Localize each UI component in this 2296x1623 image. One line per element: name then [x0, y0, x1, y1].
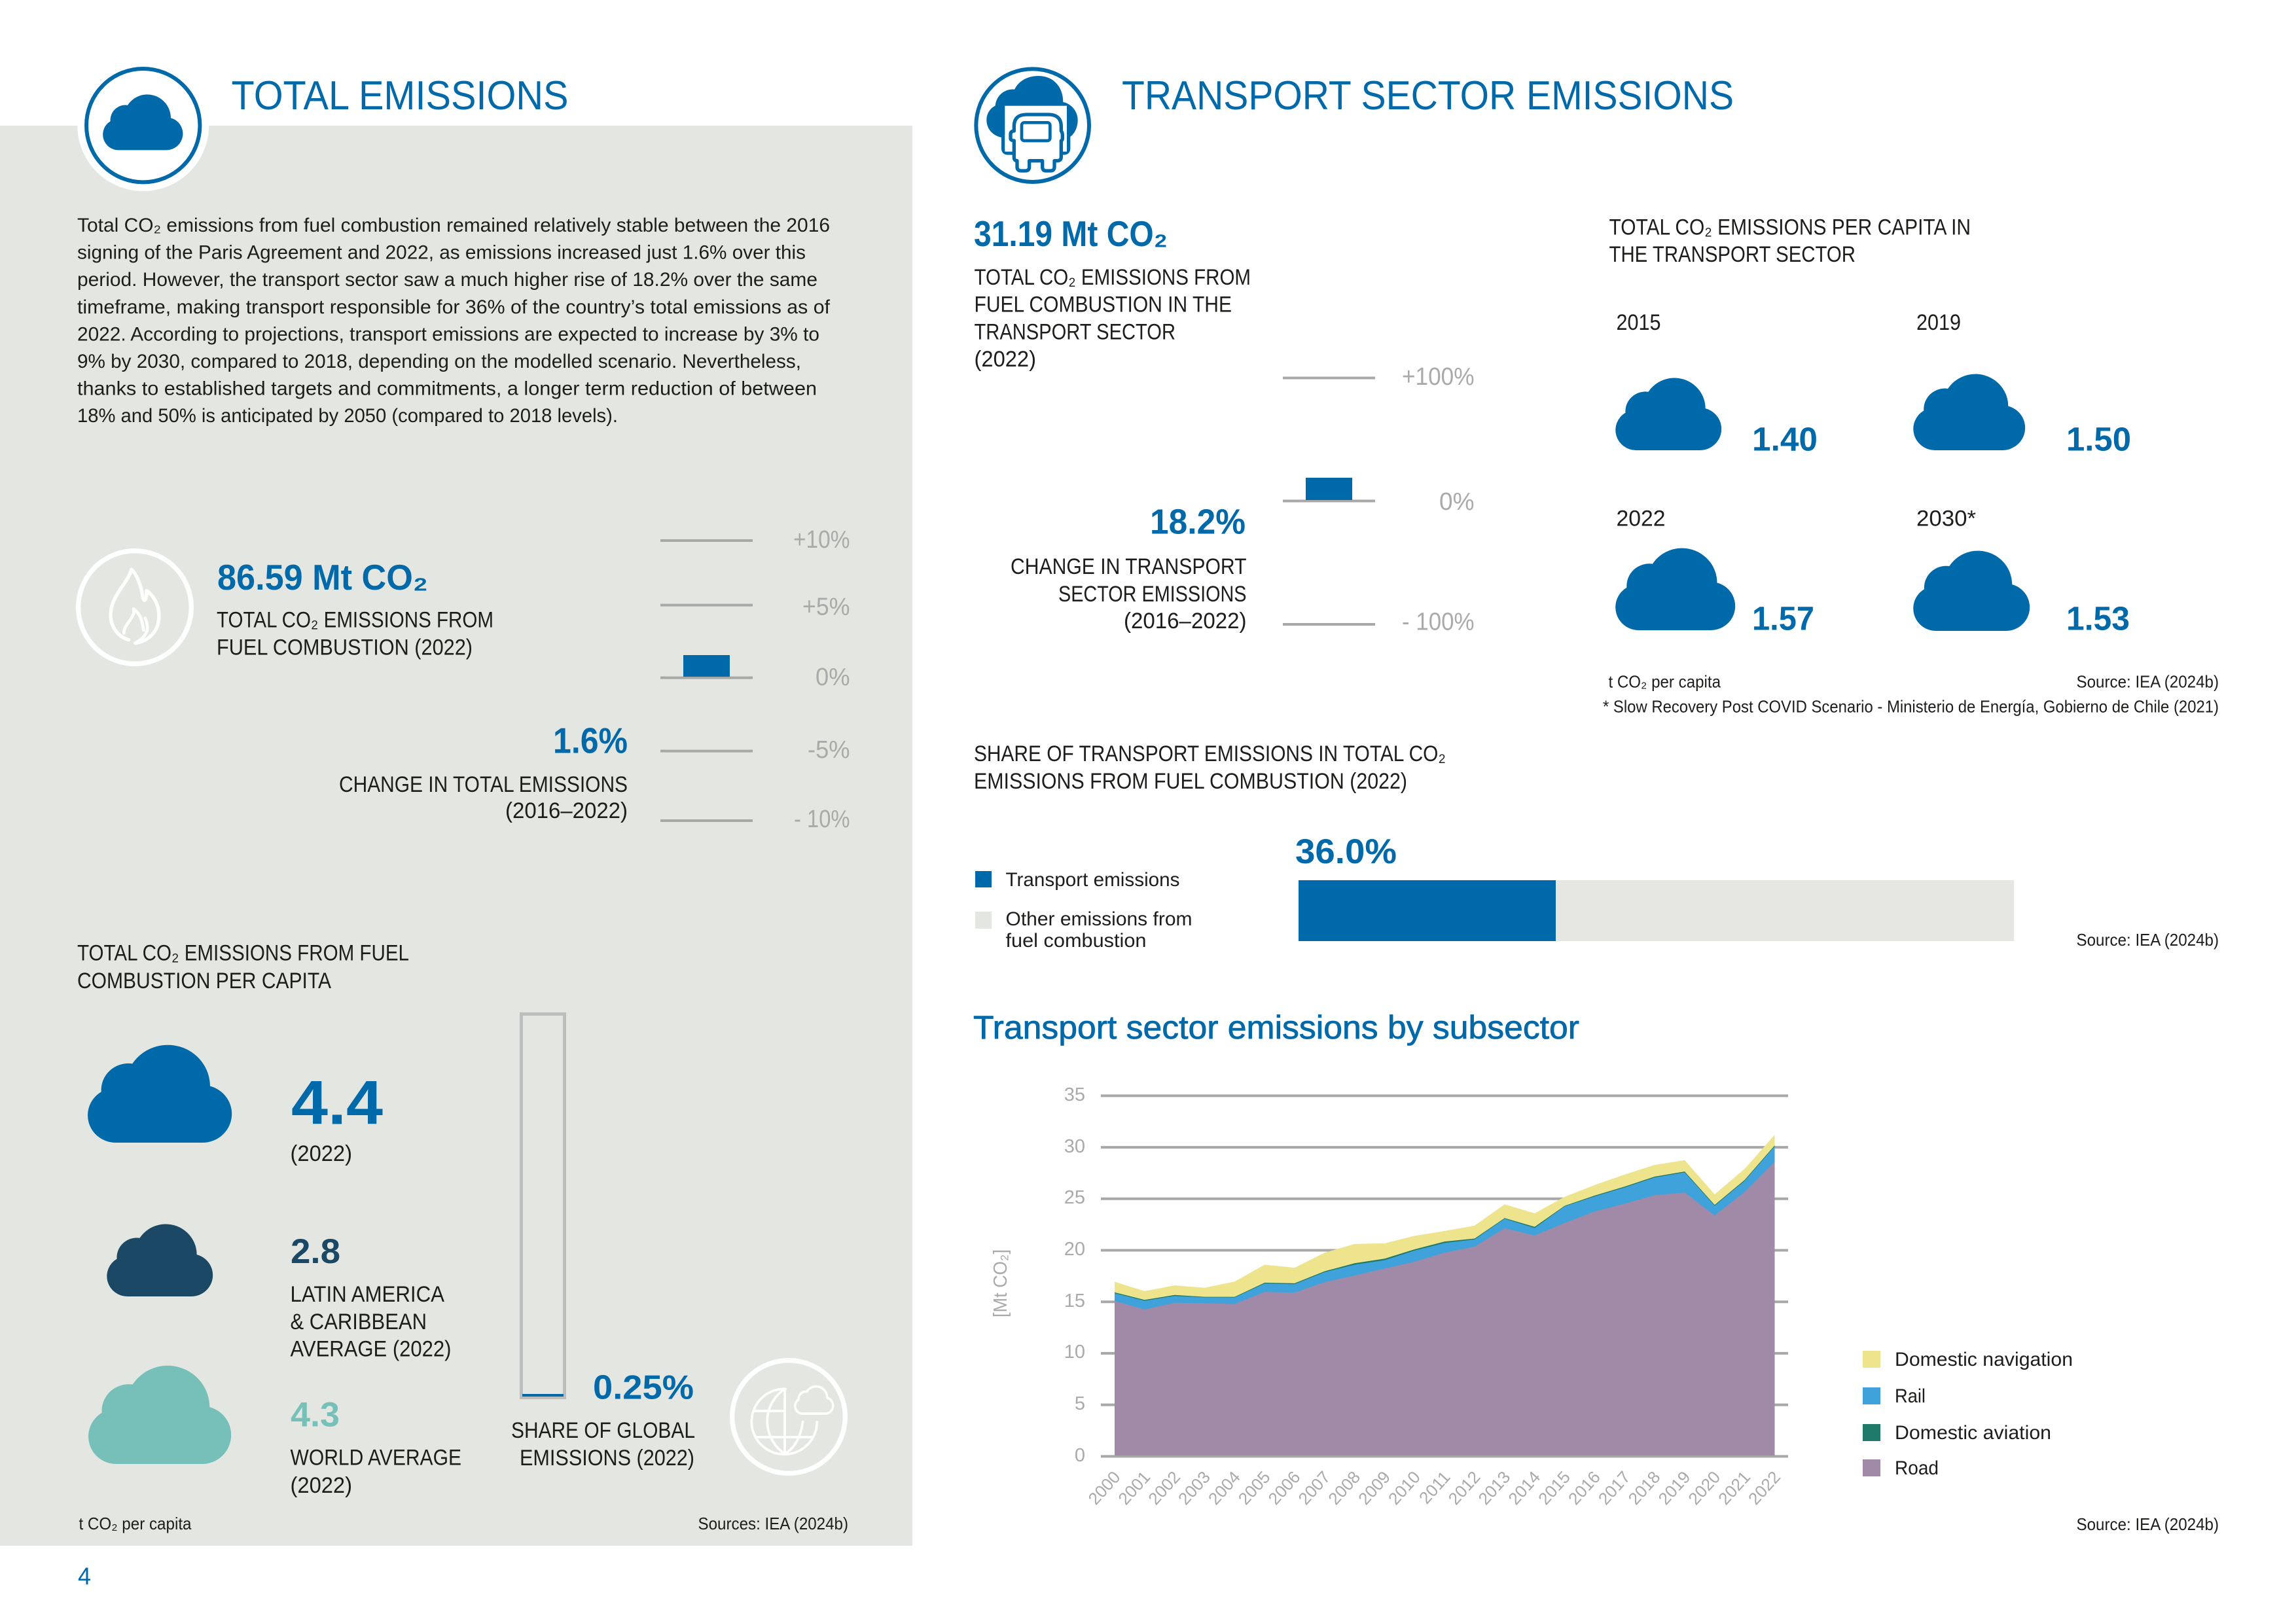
- unit note: t CO₂ per capita: [79, 1514, 192, 1533]
- legend: subsector chart: Domestic aviation: [1895, 1422, 2051, 1444]
- text block: intro paragraph: thanks to established targets and commitments, a longer term reduction of between: [77, 378, 817, 400]
- icon: world cloud: [88, 1366, 231, 1464]
- chart: change in transport emissions scale: [1283, 363, 1474, 636]
- icon: globe and cloud in circle: [732, 1361, 845, 1473]
- y axis labels: 35: [1064, 1084, 1085, 1105]
- area: domestic aviation: [1115, 1145, 1775, 1455]
- heading: per capita emissions: COMBUSTION PER CAPITA: [77, 969, 331, 993]
- y axis labels: 20: [1064, 1239, 1085, 1260]
- x axis labels: 2005: [1234, 1467, 1274, 1508]
- label: total emissions: TOTAL CO₂ EMISSIONS FROM: [217, 607, 493, 632]
- source note: Sources: IEA (2024b): [698, 1514, 848, 1533]
- y axis labels: 30: [1064, 1136, 1085, 1157]
- stat: share of global emissions: EMISSIONS (2022): [520, 1446, 694, 1471]
- x axis labels: [1084, 1467, 1784, 1508]
- text block: intro paragraph: 2022. According to projections, transport emissions are expected to increase by 3% to: [77, 323, 819, 345]
- label: change in total emissions: [339, 772, 628, 823]
- label: change in transport emissions: (2016–2022): [1124, 609, 1246, 633]
- stat: world per capita: 4.3: [291, 1396, 340, 1435]
- source note: subsector chart: Source: IEA (2024b): [2076, 1514, 2219, 1534]
- stat: share of global emissions: SHARE OF GLOBAL: [511, 1418, 695, 1443]
- chart: change in transport emissions scale: - 100%: [1402, 609, 1474, 636]
- heading: per capita emissions: [77, 941, 409, 993]
- legend: subsector chart: Domestic navigation: [1895, 1349, 2073, 1370]
- x axis labels: 2010: [1384, 1467, 1424, 1508]
- x axis labels: 2006: [1264, 1467, 1304, 1508]
- y axis labels: 25: [1064, 1187, 1085, 1208]
- x axis labels: 2018: [1624, 1467, 1664, 1508]
- x axis labels: 2001: [1114, 1467, 1154, 1508]
- legend: share bar: fuel combustion: [1005, 930, 1147, 952]
- per capita item: 2019: 1.50: [2066, 421, 2131, 458]
- stat: Chile per capita: 4.4: [291, 1069, 383, 1138]
- stat: share of global emissions: [511, 1369, 695, 1471]
- text block: intro paragraph: Total CO₂ emissions from fuel combustion remained relatively stable between the 2016: [77, 215, 830, 236]
- area: road: [1115, 1162, 1775, 1455]
- x axis labels: 2003: [1174, 1467, 1214, 1508]
- x axis labels: 2012: [1444, 1467, 1484, 1508]
- x axis labels: 2013: [1474, 1467, 1514, 1508]
- per capita item: 2022: 2022: [1617, 507, 1665, 531]
- stat: transport emissions value: 31.19 Mt CO₂: [974, 213, 1168, 254]
- stat: total emissions value: 86.59 Mt CO₂: [217, 557, 428, 597]
- heading: total emissions: TOTAL EMISSIONS: [232, 73, 568, 118]
- stat: 36 percent: 36.0%: [1295, 832, 1397, 871]
- x axis labels: 2017: [1594, 1467, 1634, 1508]
- stat: Latin America per capita: 2.8: [291, 1232, 340, 1271]
- heading: transport per capita: TOTAL CO₂ EMISSIONS PER CAPITA IN: [1609, 215, 1971, 240]
- stat: world per capita: [291, 1396, 461, 1498]
- x axis labels: 2000: [1084, 1467, 1124, 1508]
- stat: Chile per capita: [291, 1069, 383, 1166]
- label: change in transport emissions: SECTOR EMISSIONS: [1058, 582, 1246, 607]
- stat: world per capita: WORLD AVERAGE: [291, 1446, 461, 1471]
- x axis labels: 2008: [1324, 1467, 1364, 1508]
- heading: transport per capita: THE TRANSPORT SECTOR: [1609, 242, 1856, 267]
- page number: 4: [78, 1563, 91, 1590]
- per capita item: 2019: 2019: [1916, 310, 1961, 335]
- text block: intro paragraph: [77, 215, 831, 427]
- per capita item: 2015: [1615, 310, 1818, 458]
- label: total emissions: FUEL COMBUSTION (2022): [217, 635, 473, 660]
- x axis labels: 2014: [1504, 1467, 1544, 1508]
- y axis labels: 15: [1064, 1291, 1085, 1311]
- x axis labels: 2016: [1564, 1467, 1604, 1508]
- legend: subsector chart: [1863, 1349, 2073, 1479]
- area: rail: [1115, 1147, 1775, 1455]
- icon: flame in circle: [79, 551, 191, 664]
- stat: Latin America per capita: [291, 1232, 452, 1361]
- y axis labels: 0: [1075, 1445, 1085, 1466]
- chart: change in transport emissions scale: 0%: [1439, 488, 1474, 516]
- heading: transport per capita: [1609, 215, 1971, 267]
- label: change in transport emissions: [1011, 554, 1246, 633]
- icon: truck and cloud in circle: [976, 69, 1089, 182]
- per capita item: 2015: 1.40: [1752, 421, 1818, 458]
- y axis labels: [1064, 1084, 1085, 1466]
- label: transport emissions: TOTAL CO₂ EMISSIONS FROM: [974, 265, 1251, 290]
- icon: cloud in circle: [77, 60, 209, 191]
- text block: intro paragraph: timeframe, making transport responsible for 36% of the country’s total emissions as of: [77, 296, 831, 318]
- label: change in transport emissions: CHANGE IN TRANSPORT: [1011, 554, 1246, 579]
- icon: Chile cloud: [88, 1045, 232, 1143]
- stat: Latin America per capita: & CARIBBEAN: [291, 1310, 427, 1334]
- notes: transport per capita: [1603, 671, 2219, 717]
- x axis labels: 2004: [1204, 1467, 1244, 1508]
- legend: share bar: Transport emissions: [1005, 869, 1179, 891]
- heading: share of transport emissions: EMISSIONS FROM FUEL COMBUSTION (2022): [974, 769, 1407, 794]
- label: transport emissions: TRANSPORT SECTOR: [974, 319, 1175, 344]
- chart: share of global emissions bar: [521, 1014, 564, 1398]
- stat: Chile per capita: (2022): [291, 1141, 352, 1166]
- per capita item: 2030: [1913, 507, 2130, 637]
- per capita item: 2030: 2030*: [1916, 507, 1976, 531]
- notes: transport per capita: t CO₂ per capita: [1609, 671, 1721, 691]
- panel: total emissions background: [0, 126, 912, 1546]
- label: change in total emissions: (2016–2022): [505, 798, 628, 823]
- chart: change in total emissions scale: -5%: [808, 736, 850, 764]
- notes: transport per capita: Source: IEA (2024b): [2076, 671, 2219, 691]
- heading: subsector chart: Transport sector emissions by subsector: [973, 1009, 1579, 1046]
- x axis labels: 2021: [1714, 1467, 1754, 1508]
- chart: change in total emissions scale: [660, 526, 850, 833]
- chart: change in transport emissions scale: +100%: [1402, 363, 1474, 391]
- label: transport emissions: (2022): [974, 347, 1036, 372]
- per capita item: 2030: 1.53: [2066, 600, 2130, 637]
- per capita item: 2019: [1913, 310, 2131, 458]
- notes: transport per capita: * Slow Recovery Post COVID Scenario - Ministerio de Energía, Gobierno de Chile (2021): [1603, 697, 2219, 717]
- x axis labels: 2020: [1684, 1467, 1724, 1508]
- chart: area chart by subsector: [990, 1084, 1788, 1508]
- label: total emissions: [217, 607, 493, 660]
- source note: share bar: Source: IEA (2024b): [2076, 930, 2219, 950]
- heading: share of transport emissions: [974, 741, 1446, 794]
- heading: share of transport emissions: SHARE OF TRANSPORT EMISSIONS IN TOTAL CO₂: [974, 741, 1446, 766]
- x axis labels: 2011: [1415, 1467, 1454, 1508]
- per capita item: 2022: 1.57: [1752, 600, 1814, 637]
- label: transport emissions: FUEL COMBUSTION IN THE: [974, 292, 1232, 317]
- x axis labels: 2002: [1144, 1467, 1184, 1508]
- y axis labels: 5: [1075, 1393, 1085, 1414]
- x axis labels: 2009: [1354, 1467, 1394, 1508]
- label: change in total emissions: CHANGE IN TOTAL EMISSIONS: [339, 772, 628, 797]
- icon: Latin America cloud: [107, 1224, 213, 1296]
- per capita item: 2022: [1615, 507, 1814, 637]
- chart: share bar: [1299, 880, 2014, 941]
- heading: per capita emissions: TOTAL CO₂ EMISSIONS FROM FUEL: [77, 941, 409, 966]
- text block: intro paragraph: 18% and 50% is anticipated by 2050 (compared to 2018 levels).: [77, 405, 618, 427]
- stat: Latin America per capita: LATIN AMERICA: [291, 1282, 444, 1307]
- stat: world per capita: (2022): [291, 1473, 352, 1498]
- text block: intro paragraph: period. However, the transport sector saw a much higher rise of 18.2% over the same: [77, 269, 817, 291]
- text block: intro paragraph: signing of the Paris Agreement and 2022, as emissions increased just 1.6% over this: [77, 242, 806, 264]
- per capita item: 2015: 2015: [1617, 310, 1661, 335]
- legend: share bar: Other emissions from: [1005, 908, 1193, 930]
- legend: subsector chart: Rail: [1895, 1385, 1926, 1407]
- y axis labels: 10: [1064, 1342, 1085, 1363]
- text block: intro paragraph: 9% by 2030, compared to 2018, depending on the modelled scenario. Nevertheless,: [77, 351, 801, 372]
- chart: change in total emissions scale: 0%: [816, 664, 850, 691]
- y axis title: [Mt CO₂]: [990, 1249, 1011, 1317]
- chart: change in total emissions scale: +10%: [793, 526, 850, 554]
- heading: transport sector emissions: TRANSPORT SECTOR EMISSIONS: [1122, 73, 1734, 118]
- x axis labels: 2022: [1744, 1467, 1784, 1508]
- area: domestic navigation: [1115, 1135, 1775, 1455]
- stat: change in transport emissions: 18.2%: [1150, 503, 1246, 542]
- x axis labels: 2019: [1654, 1467, 1694, 1508]
- chart: change in total emissions scale: - 10%: [794, 806, 850, 833]
- stat: Latin America per capita: AVERAGE (2022): [291, 1336, 452, 1361]
- legend: subsector chart: Road: [1895, 1457, 1939, 1479]
- legend: share bar: [975, 869, 1193, 952]
- label: transport emissions: [974, 265, 1251, 372]
- x axis labels: 2007: [1294, 1467, 1334, 1508]
- x axis labels: 2015: [1534, 1467, 1574, 1508]
- stat: change in total emissions: 1.6%: [553, 720, 628, 760]
- chart: change in total emissions scale: +5%: [802, 593, 850, 620]
- stat: share of global emissions: 0.25%: [593, 1369, 694, 1407]
